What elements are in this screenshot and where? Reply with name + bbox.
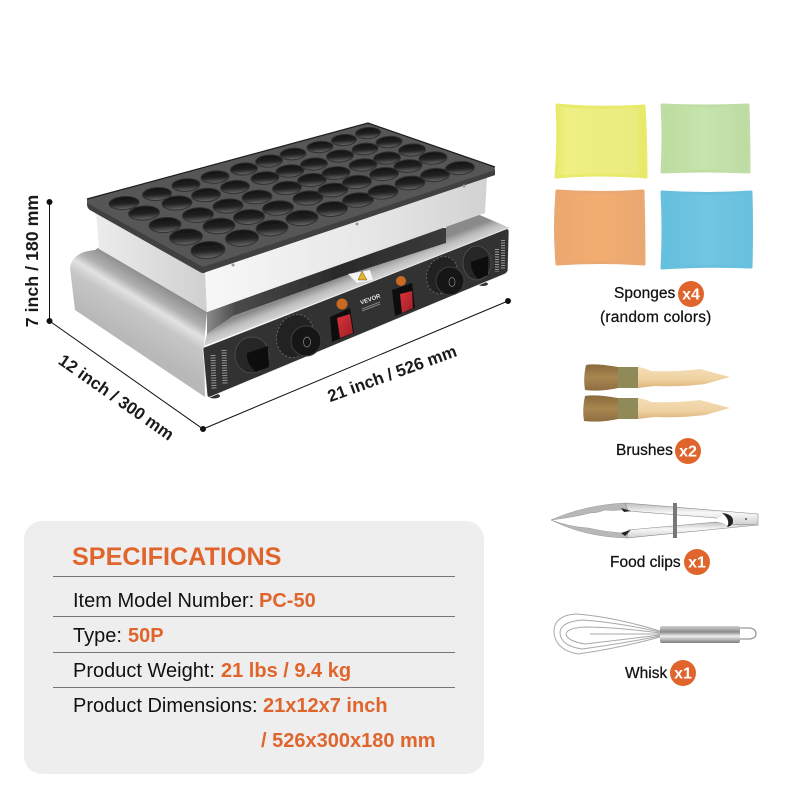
temperature knob left <box>235 337 269 373</box>
spec: dimensions: 21x12x7 inch <box>263 695 388 717</box>
spec: type: Type: <box>73 625 122 647</box>
brand: VEVOR <box>360 293 382 306</box>
power switch left <box>330 308 354 342</box>
label: width dimension: 21 inch / 526 mm <box>325 342 459 406</box>
caption: food clips: x1 <box>688 554 706 572</box>
spec: dimensions: Product Dimensions: <box>73 695 258 717</box>
caption: sponges <box>600 281 712 326</box>
caption: food clips <box>610 549 710 575</box>
caption: whisk: x1 <box>674 666 692 682</box>
warning label <box>348 270 373 283</box>
heading: SPECIFICATIONS <box>72 543 281 571</box>
sponges <box>556 105 752 268</box>
spec: model number: PC-50 <box>259 590 316 612</box>
timer knob right <box>421 252 464 298</box>
spec: weight: Product Weight: <box>73 660 215 682</box>
indicator light left <box>336 298 348 310</box>
griddle left wall <box>96 212 207 312</box>
black control panel <box>203 229 509 397</box>
spec: type: 50P <box>128 625 164 647</box>
scale markings left <box>213 350 225 389</box>
sponge: orange <box>556 191 644 264</box>
griddle holes <box>109 127 475 260</box>
scale markings right <box>497 240 503 272</box>
caption: sponges: Sponges <box>614 285 675 302</box>
product: pancake griddle machine <box>70 123 510 398</box>
spec: weight: 21 lbs / 9.4 kg <box>221 660 351 682</box>
caption: whisk <box>625 660 696 686</box>
spec: dimensions metric: / 526x300x180 mm <box>261 730 436 752</box>
indicator light right <box>396 276 406 286</box>
panel: specifications <box>24 521 484 774</box>
spec: model number: Item Model Number: <box>73 590 254 612</box>
brush: bottom <box>583 395 730 422</box>
whisk <box>554 614 756 654</box>
shadow beneath griddle <box>207 228 446 334</box>
timer knob left <box>271 309 321 363</box>
griddle plate <box>87 123 495 273</box>
caption: sponges: (random colors) <box>600 309 712 326</box>
temperature knob right <box>463 246 491 280</box>
caption: sponges: x4 <box>682 286 700 304</box>
base housing side <box>70 248 207 397</box>
label: height dimension: 7 inch / 180 mm <box>22 195 42 327</box>
label: depth dimension: 12 inch / 300 mm <box>55 351 177 444</box>
food clips <box>551 503 758 538</box>
brushes <box>583 364 730 422</box>
dimension lines <box>47 200 510 432</box>
sponge: blue <box>662 192 752 268</box>
griddle right wall <box>205 176 487 312</box>
caption: brushes: Brushes <box>616 442 673 459</box>
caption: food clips: Food clips <box>610 554 681 571</box>
sponge: yellow <box>556 105 646 177</box>
base housing top strip <box>204 213 510 346</box>
sponge: green <box>662 105 749 172</box>
brush: top <box>584 364 730 391</box>
feet <box>208 282 488 398</box>
caption: whisk: Whisk <box>625 665 667 682</box>
power switch right <box>392 283 415 316</box>
caption: brushes <box>616 438 701 464</box>
caption: brushes: x2 <box>679 444 697 460</box>
